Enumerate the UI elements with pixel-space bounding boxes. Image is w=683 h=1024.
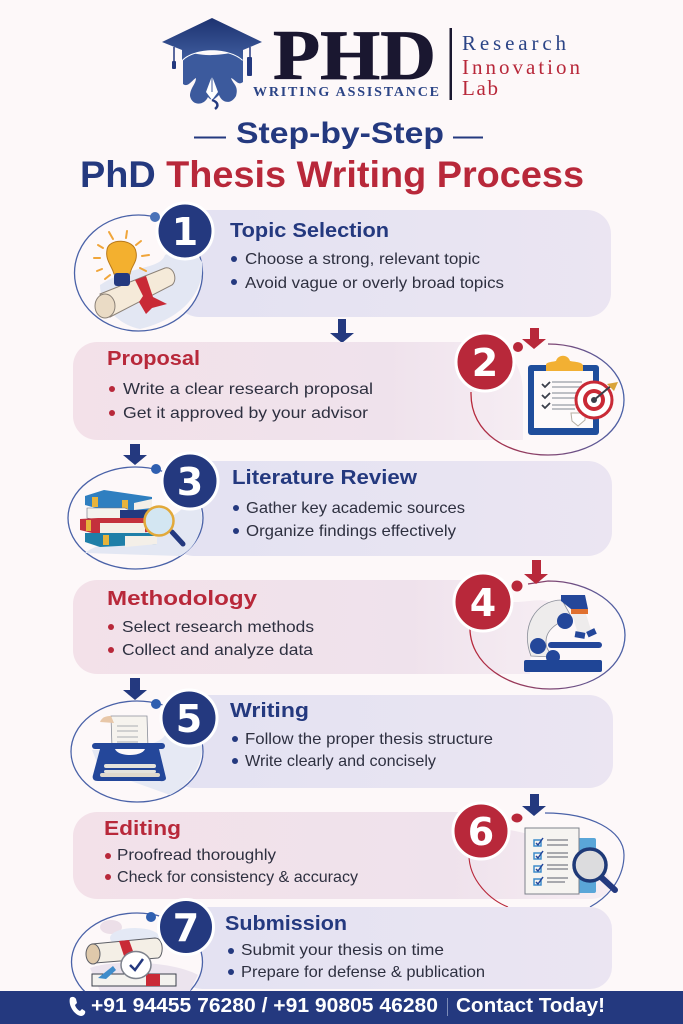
heading: editing: Editing	[104, 818, 181, 840]
heading: writing: Writing	[230, 700, 309, 722]
bullet list: Prepare for defense & publication	[241, 964, 485, 981]
bullet list: Get it approved by your advisor	[123, 405, 369, 422]
connector dot	[513, 342, 523, 352]
lab name: Innovation	[462, 55, 580, 79]
badge: number 1: 1	[172, 210, 198, 254]
heading: methodology: Methodology	[107, 588, 258, 610]
badge: number 6	[453, 803, 509, 859]
connector dot	[150, 212, 160, 222]
bullet list	[232, 731, 493, 770]
badge: number 4	[454, 573, 512, 631]
badge: number 3	[162, 453, 218, 509]
bullet list	[105, 847, 358, 886]
bullet list	[233, 500, 465, 540]
panel: step 2 proposal	[73, 328, 624, 455]
title line one: Step-by-Step	[236, 117, 444, 150]
bullet list: Follow the proper thesis structure	[245, 731, 493, 748]
badge: number 7	[158, 900, 214, 954]
heading: submission: Submission	[225, 913, 347, 935]
badge: number 6: 6	[468, 810, 494, 854]
brand tagline: WRITING ASSISTANCE	[253, 85, 439, 100]
phone numbers: +91 94455 76280 / +91 90805 46280	[91, 995, 438, 1017]
badge: number 1	[157, 203, 213, 259]
panel: step 4 methodology	[73, 560, 625, 689]
bullet list: Avoid vague or overly broad topics	[245, 275, 504, 292]
call to action: Contact Today!	[456, 995, 605, 1017]
bullet list: Collect and analyze data	[122, 642, 313, 659]
heading: topic selection: Topic Selection	[230, 220, 389, 242]
icon: microscope	[524, 595, 602, 672]
badge: number 5: 5	[176, 697, 202, 741]
brand name PHD: PHD	[273, 17, 436, 95]
icon: graduation cap and pen	[162, 18, 262, 109]
connector dot	[512, 580, 522, 592]
connector dot	[146, 912, 156, 922]
badge: number 2	[456, 333, 514, 391]
bullet list: Organize findings effectively	[246, 523, 456, 540]
bullet list: Write a clear research proposal	[123, 381, 373, 398]
logo	[162, 17, 580, 109]
arrow: into step 4	[524, 560, 548, 584]
icon: clipboard and target	[528, 356, 618, 435]
connector dot	[151, 699, 161, 709]
footer contact bar	[0, 991, 683, 1024]
badge: number 4: 4	[470, 581, 496, 625]
badge: number 3: 3	[177, 460, 203, 504]
panel: step 3 literature review	[68, 444, 612, 569]
footer separator	[447, 998, 448, 1016]
icon: typewriter	[92, 716, 166, 781]
panel: step 1 topic selection	[74, 203, 611, 331]
bullet list	[228, 942, 485, 981]
lab name	[462, 31, 580, 100]
bullet list	[109, 381, 373, 422]
bullet list: Select research methods	[122, 619, 314, 636]
panel: step 5 writing	[71, 678, 613, 802]
bullet list: Proofread thoroughly	[117, 847, 276, 864]
title	[80, 117, 584, 195]
arrow: into step 6	[522, 794, 546, 816]
badge: number 7: 7	[173, 906, 199, 950]
bullet list	[231, 251, 504, 292]
icon: light bulb and scroll	[94, 231, 175, 318]
connector dot	[512, 814, 522, 822]
heading: proposal: Proposal	[107, 348, 200, 370]
title line two: PhD Thesis Writing Process	[80, 154, 584, 195]
bullet list: Write clearly and concisely	[245, 753, 436, 770]
arrow: step 1 to 2	[330, 319, 354, 343]
icon: stack of books and magnifier	[80, 490, 183, 547]
icon: telephone	[70, 997, 85, 1016]
icon: checklist and magnifier	[525, 828, 615, 894]
arrow: into step 5	[123, 678, 147, 700]
bullet list: Choose a strong, relevant topic	[245, 251, 480, 268]
logo divider	[450, 28, 452, 100]
icon: diploma, seal and book	[86, 938, 176, 986]
panel: step 7 submission	[72, 900, 612, 1011]
bullet list: Submit your thesis on time	[241, 942, 444, 959]
badge: number 5	[161, 690, 217, 746]
lab name: Research	[462, 31, 566, 55]
badge: number 2: 2	[472, 341, 498, 385]
bullet list: Check for consistency & accuracy	[117, 869, 358, 886]
heading: literature review: Literature Review	[232, 467, 417, 489]
bullet list: Gather key academic sources	[246, 500, 465, 517]
connector dot	[151, 464, 161, 474]
arrow: into step 3	[123, 444, 147, 465]
panel: step 6 editing	[73, 794, 624, 907]
lab name: Lab	[462, 76, 498, 100]
arrow: into step 2	[522, 328, 546, 349]
bullet list	[108, 619, 314, 659]
